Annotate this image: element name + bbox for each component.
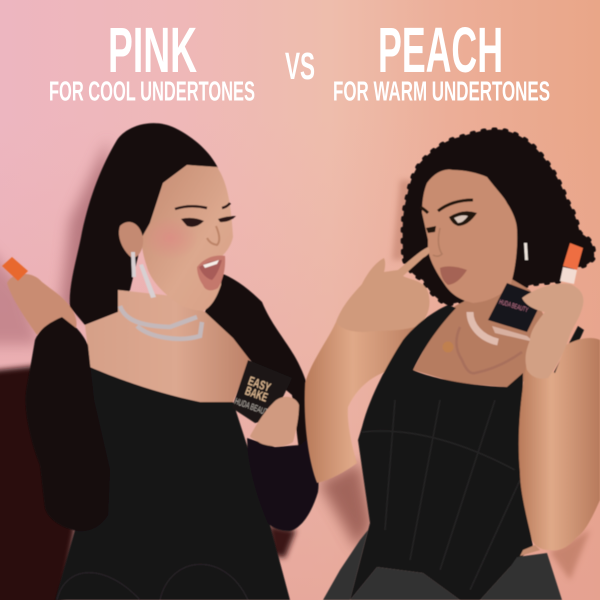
gold chain xyxy=(456,327,522,373)
title: peach column xyxy=(333,14,550,106)
brows xyxy=(420,200,473,213)
wall shadows xyxy=(0,140,590,600)
nose shade xyxy=(207,226,219,245)
left sleeve xyxy=(26,317,110,531)
pointing hand xyxy=(336,247,430,332)
face xyxy=(142,165,233,311)
eyes xyxy=(181,216,236,227)
right strap xyxy=(552,326,584,378)
right arm xyxy=(519,338,600,550)
subheading: cool undertones: FOR COOL UNDERTONES xyxy=(49,76,255,106)
ear xyxy=(119,222,143,258)
mouth interior xyxy=(199,260,222,280)
compact label bake: BAKE xyxy=(243,384,270,405)
eyes xyxy=(426,211,477,233)
open mouth xyxy=(197,255,225,290)
brows xyxy=(175,203,230,209)
compact brand text: HUDA BEAUTY xyxy=(498,299,529,314)
lips xyxy=(440,266,467,285)
neck and chest xyxy=(413,278,560,387)
earring xyxy=(524,243,528,260)
dress seams xyxy=(57,564,248,600)
right sleeve xyxy=(247,438,319,531)
waist skin xyxy=(520,545,540,556)
heading: PINK: PINK xyxy=(108,14,197,86)
eye whites xyxy=(454,215,468,223)
compact held xyxy=(488,283,544,342)
compact brand: HUDA BEAUTY xyxy=(233,396,273,418)
compact box xyxy=(232,360,292,423)
peach lipstick xyxy=(560,243,583,284)
left woman figure xyxy=(2,123,319,600)
earring xyxy=(131,252,156,298)
title: pink column xyxy=(49,14,255,106)
holding hand xyxy=(522,284,583,379)
hair falling over right shoulder xyxy=(203,272,315,458)
jeans xyxy=(323,530,562,600)
necklace xyxy=(442,312,522,373)
raised left hand xyxy=(7,274,77,335)
heading: PEACH: PEACH xyxy=(378,14,503,86)
chain necklace xyxy=(120,306,202,339)
nose shade xyxy=(433,228,442,256)
face xyxy=(422,170,517,303)
label: VS: VS xyxy=(285,46,315,88)
orange lipstick xyxy=(2,257,28,281)
right woman figure xyxy=(305,129,600,600)
ponytail hair xyxy=(70,123,218,325)
left arm xyxy=(305,322,425,483)
pearl strand xyxy=(470,312,498,342)
holding hand xyxy=(250,397,299,446)
black corset top xyxy=(350,305,533,600)
corset seams xyxy=(362,400,520,590)
pendant ball xyxy=(442,342,454,352)
curly hair xyxy=(403,129,594,305)
compact label easy: EASY xyxy=(246,374,273,395)
teeth xyxy=(203,260,219,268)
black dress body xyxy=(55,367,290,600)
neck and chest skin xyxy=(85,290,250,402)
cheek blush xyxy=(142,216,198,260)
